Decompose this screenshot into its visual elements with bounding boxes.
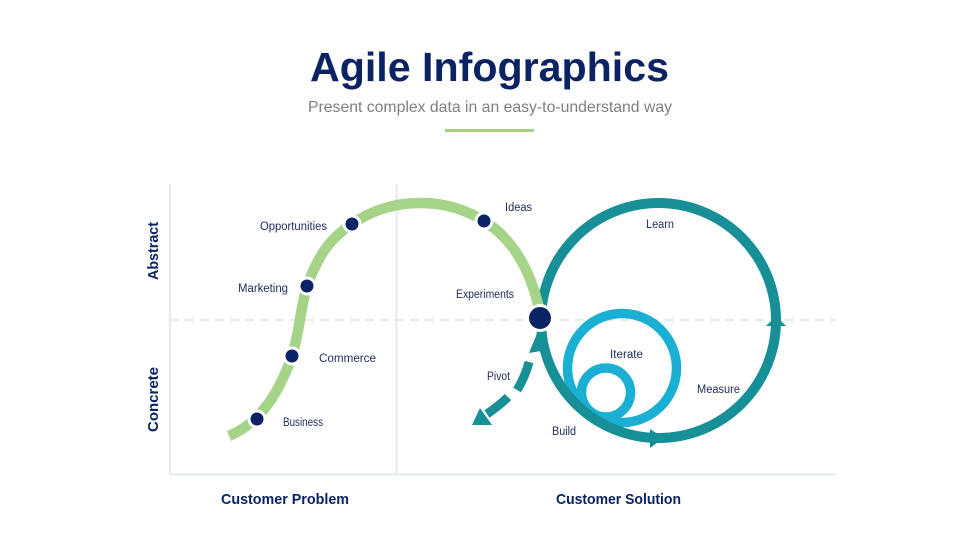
arrowhead: build (650, 429, 664, 448)
axis label: customer solution: Customer Solution (556, 491, 681, 508)
chart: build measure learn loop (529, 203, 786, 448)
title: Agile Infographics (310, 44, 669, 90)
labels: Pivot (487, 371, 511, 383)
labels: Iterate (610, 349, 643, 361)
title underline (445, 129, 534, 132)
chart axes (170, 184, 836, 474)
arrowhead: entering experiments point (529, 331, 547, 353)
arrowhead: measure (766, 316, 786, 326)
chart: pivot arrow (472, 362, 529, 425)
milestone dots (249, 213, 552, 427)
labels: Learn (646, 219, 674, 231)
labels: Measure (697, 384, 740, 396)
chart: iterate loops (568, 314, 676, 422)
labels: Commerce (319, 353, 376, 365)
labels: Build (552, 426, 576, 438)
chart: green problem curve (229, 203, 541, 436)
subtitle: Present complex data in an easy-to-understand way (308, 99, 672, 116)
axis label: abstract: Abstract (145, 222, 162, 280)
labels: Business (283, 417, 323, 429)
labels: Opportunities (260, 221, 327, 233)
axis label: concrete: Concrete (145, 367, 162, 432)
labels: Ideas (505, 202, 532, 214)
labels: Experiments (456, 289, 514, 301)
labels: Marketing (238, 283, 288, 295)
labels (238, 202, 740, 438)
axis label: customer problem: Customer Problem (221, 491, 349, 508)
